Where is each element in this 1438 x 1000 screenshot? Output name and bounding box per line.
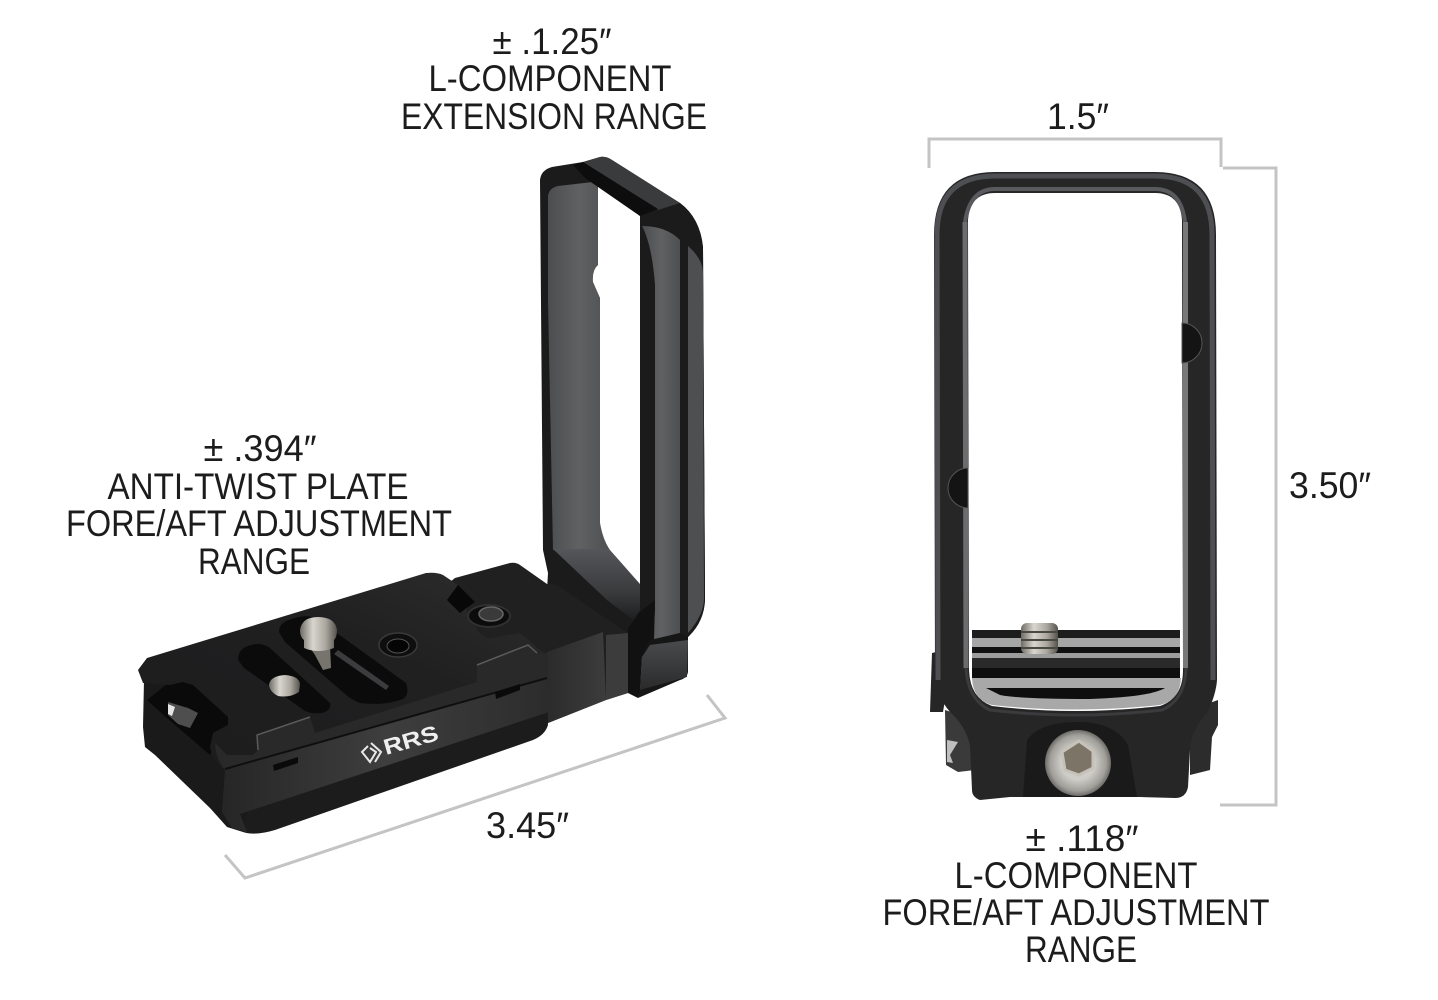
upright: rear arm and top bar	[540, 157, 705, 645]
foot of L-component	[638, 633, 688, 698]
label: L-component fore/aft adjustment range	[882, 818, 1270, 970]
label: L-component fore/aft adjustment range: FORE/AFT ADJUSTMENT	[882, 892, 1270, 933]
dimension bracket: height	[1220, 168, 1276, 805]
lower gap	[986, 688, 1165, 699]
dark band	[972, 668, 1180, 678]
textured band	[972, 658, 1180, 668]
frame top inner sheen	[965, 189, 1185, 222]
lower reflective curve	[972, 678, 1181, 710]
right screw recess	[1182, 323, 1202, 363]
plate lip highlight	[257, 645, 537, 750]
front body pocket right	[495, 684, 520, 699]
photo: L-plate front view	[930, 172, 1218, 800]
label: L-component extension range	[401, 21, 707, 137]
rear screw hole	[468, 605, 510, 627]
bolt hex socket	[1062, 741, 1093, 775]
mid reflective band	[972, 653, 1180, 658]
photo: L-plate three-quarter view	[138, 157, 705, 834]
stud screw: shaft	[308, 645, 331, 670]
label: anti-twist plate fore/aft adjustment range	[66, 428, 452, 582]
upright: front arm right strip	[688, 246, 704, 633]
label: anti-twist plate fore/aft adjustment range: RANGE	[198, 541, 310, 582]
logo mark	[362, 743, 381, 762]
plate lower edge highlight	[225, 678, 547, 769]
short slot	[238, 644, 330, 713]
upright: rear arm inner face	[548, 182, 610, 550]
frame inner lower edge sheen	[966, 668, 1186, 715]
upper reflective band	[972, 638, 1180, 647]
upper plate band	[972, 630, 1180, 638]
frame right inner highlight	[1183, 222, 1188, 668]
label: anti-twist plate fore/aft adjustment range: ± .394″	[204, 428, 316, 469]
upright: front arm gray face	[642, 226, 680, 640]
label: L-component extension range: L-COMPONENT	[428, 58, 672, 99]
stud screw: head and thread	[300, 617, 337, 651]
label: L-component extension range: EXTENSION RANGE	[401, 96, 707, 137]
foot gray face	[640, 640, 688, 690]
stud thread body	[1021, 623, 1058, 654]
front body pocket left	[273, 757, 298, 771]
long slot inner reflection	[334, 650, 389, 690]
upright: rear arm lower wedge	[553, 549, 640, 620]
upright: top bar face	[583, 157, 680, 210]
rear black notch	[447, 585, 475, 613]
label: L-component extension range: ± .1.25″	[492, 21, 612, 62]
frame outer edge sheen	[937, 176, 1213, 680]
dimension bracket: width	[929, 139, 1221, 168]
upright: window opening	[593, 185, 640, 584]
label: anti-twist plate fore/aft adjustment range: ANTI-TWIST PLATE	[108, 466, 408, 507]
rear block: step	[606, 633, 628, 700]
plate seen through window	[972, 630, 1181, 710]
hex bolt	[168, 702, 198, 728]
frame	[934, 172, 1217, 800]
front body	[222, 678, 549, 832]
bolt recess	[1023, 722, 1137, 797]
long slot	[279, 616, 407, 704]
logo: RRS: RRS	[380, 720, 441, 760]
label: width 1.5 inches: 1.5″	[1047, 96, 1109, 137]
top plate face	[138, 573, 547, 770]
upright: top bar slot	[573, 162, 658, 216]
left lower side plate	[945, 710, 975, 772]
left end recess	[147, 678, 234, 755]
hex bolt highlight	[168, 704, 175, 716]
rear screw hole inner	[479, 607, 503, 621]
label: L-component fore/aft adjustment range: ± .118″	[1026, 818, 1138, 859]
label: length 3.45 inches: 3.45″	[486, 805, 569, 846]
label: L-component fore/aft adjustment range: RANGE	[1025, 929, 1137, 970]
rear block: side face	[547, 632, 606, 723]
right side plate	[1190, 700, 1218, 775]
screw hole	[379, 633, 417, 657]
left screw recess	[948, 468, 968, 508]
small screw	[269, 675, 300, 696]
bottom slab	[240, 702, 548, 834]
socket head bolt	[1045, 730, 1111, 796]
dimension bracket: length	[225, 695, 725, 878]
screw hole inner	[387, 639, 409, 653]
stud thread grooves	[1021, 632, 1058, 648]
left side plate edge	[930, 650, 945, 712]
left side highlight	[947, 740, 958, 763]
logo: RRS	[362, 720, 441, 762]
upright: front arm	[640, 203, 705, 645]
label: height 3.50 inches: 3.50″	[1289, 465, 1371, 506]
dark slot band	[972, 647, 1180, 653]
arm base black strip	[628, 600, 655, 698]
frame left inner highlight	[965, 222, 966, 668]
label: anti-twist plate fore/aft adjustment range: FORE/AFT ADJUSTMENT	[66, 503, 452, 544]
label: L-component fore/aft adjustment range: L-COMPONENT	[954, 855, 1198, 896]
plate lip	[215, 645, 547, 770]
threaded stud	[1021, 623, 1058, 654]
rear block top	[440, 563, 628, 723]
left end	[143, 678, 250, 832]
